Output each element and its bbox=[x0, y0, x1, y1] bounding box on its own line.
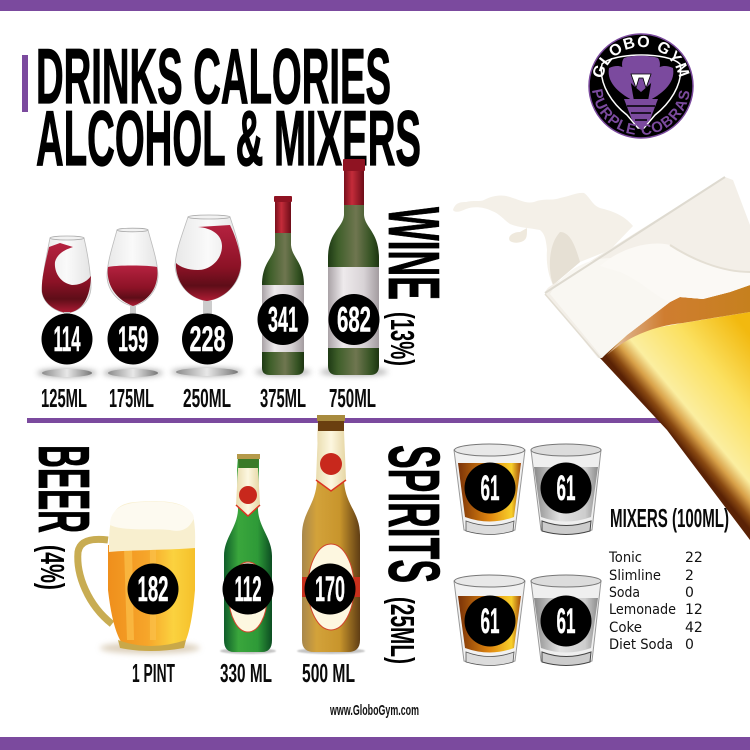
wine glass 175ml: 159 bbox=[118, 320, 148, 359]
title bbox=[36, 32, 421, 182]
bottom purple bar bbox=[0, 737, 750, 750]
big beer glass bbox=[453, 177, 750, 540]
beer size labels: 1 PINT bbox=[132, 658, 175, 688]
spirits measure: (25ML) bbox=[384, 597, 421, 664]
wine glass 125ml bbox=[37, 236, 97, 377]
beer orange band bbox=[607, 285, 750, 355]
title accent bar bbox=[22, 55, 28, 112]
wine section: WINE bbox=[373, 207, 453, 300]
beer splash bbox=[453, 193, 633, 285]
wine size labels bbox=[41, 383, 376, 413]
beer section bbox=[23, 415, 419, 719]
mixers table: Soda bbox=[609, 585, 640, 601]
shot glass with spirit, top bbox=[454, 444, 525, 534]
beer strength: (4%) bbox=[34, 545, 71, 590]
section divider bbox=[27, 418, 667, 423]
website: www.GloboGym.com bbox=[329, 702, 419, 719]
wine bottle 375ml bbox=[255, 196, 311, 376]
shot glass with spirit, top: 61 bbox=[480, 469, 500, 508]
shot glass with mixer, bottom: 61 bbox=[556, 602, 576, 641]
wine bottle 750ml: 682 bbox=[337, 300, 371, 340]
wine size labels: 750ML bbox=[329, 383, 376, 413]
green beer bottle bbox=[220, 454, 276, 654]
mixers table: 12 bbox=[685, 602, 703, 618]
beer size labels: 330 ML bbox=[220, 658, 272, 688]
wine size labels: 375ML bbox=[260, 383, 306, 413]
glass upper and foam bbox=[545, 177, 750, 358]
wine strength: (13%) bbox=[384, 312, 421, 366]
wine glass 125ml: 114 bbox=[54, 320, 81, 359]
mixers table: 0 bbox=[685, 585, 694, 601]
amber beer bottle bbox=[297, 415, 365, 654]
beer liquid bbox=[600, 312, 750, 540]
beer size labels bbox=[132, 658, 355, 688]
logo: Globo Gym Purple Cobras bbox=[588, 33, 694, 139]
mixers table: Lemonade bbox=[609, 602, 676, 618]
spirits section: SPIRITS bbox=[373, 445, 453, 583]
wine bottle 375ml: 341 bbox=[268, 300, 298, 340]
top purple bar bbox=[0, 0, 750, 11]
green beer bottle: 112 bbox=[234, 570, 262, 609]
wine glass 175ml bbox=[103, 228, 163, 377]
shot glass with spirit, bottom bbox=[454, 575, 525, 666]
wine glass 250ml: 228 bbox=[190, 320, 226, 359]
beer section: BEER bbox=[23, 445, 103, 533]
mixers table: 2 bbox=[685, 568, 694, 584]
mixers table: 22 bbox=[685, 550, 703, 566]
beer mug: 182 bbox=[138, 570, 168, 609]
wine glass 250ml bbox=[171, 215, 243, 376]
mixers table: Diet Soda bbox=[609, 637, 673, 653]
shot glass with spirit, bottom: 61 bbox=[480, 602, 500, 641]
logo: Globo Gym Purple Cobras: PURPLE COBRAS bbox=[592, 89, 690, 135]
shot glass with mixer, bottom bbox=[531, 575, 601, 666]
logo: Globo Gym Purple Cobras: GLOBO GYM bbox=[593, 36, 690, 77]
beer mug bbox=[78, 501, 200, 654]
wine size labels: 175ML bbox=[109, 383, 154, 413]
mixers table: Tonic bbox=[608, 550, 642, 566]
mixers table bbox=[608, 550, 703, 653]
mixers table: 42 bbox=[685, 620, 703, 636]
spirits section bbox=[373, 444, 601, 666]
beer size labels: 500 ML bbox=[302, 658, 355, 688]
mixers table: 0 bbox=[685, 637, 694, 653]
wine size labels: 125ML bbox=[41, 383, 87, 413]
wine size labels: 250ML bbox=[183, 383, 231, 413]
mixers table: Coke bbox=[609, 620, 642, 636]
shot glass with mixer, top: 61 bbox=[556, 469, 576, 508]
wine section bbox=[37, 159, 453, 413]
title: DRINKS CALORIES bbox=[36, 32, 391, 120]
amber beer bottle: 170 bbox=[315, 570, 345, 609]
mixers table: Slimline bbox=[609, 568, 661, 584]
wine bottle 750ml bbox=[320, 159, 388, 376]
shot glass with mixer, top bbox=[531, 444, 601, 534]
